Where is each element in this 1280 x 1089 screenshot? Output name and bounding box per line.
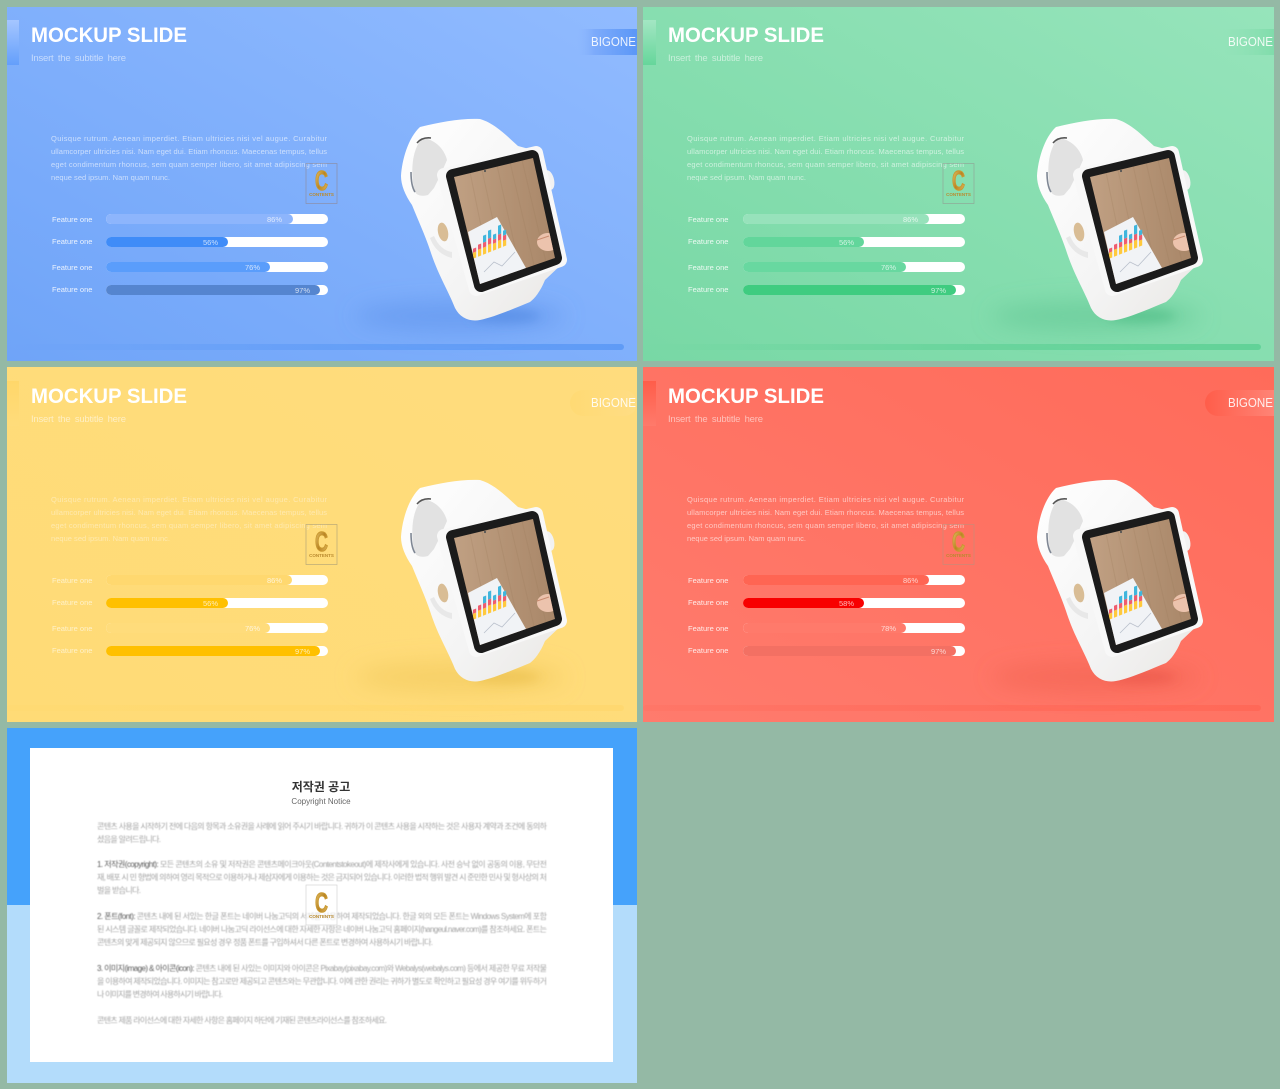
section: image and icon: 나 이미지를 변경하여 사용하시기 바랍니다. [97, 989, 223, 999]
feature bars: Feature one [688, 237, 728, 246]
body text: ullamcorper ultricies nisi. Nam eget dui. Etiam rhoncus. Maecenas tempus, tellus [51, 508, 327, 517]
section: image and icon: 을 이용하여 제작되었습니다. 이미지는 참고로만 제공되고 콘텐츠와는 무관합니다. 이에 관한 권리는 귀하가 별도로 확인하고 필요성 경우 여기를 위두하거 [97, 976, 547, 986]
watermark badge: CONTENTS [309, 914, 334, 919]
feature bars: Feature one [52, 624, 92, 633]
feature bars: 97% [931, 647, 946, 656]
feature bars: 86% [903, 576, 918, 585]
feature bars: 56% [203, 599, 218, 608]
heading: 저작권 공고 [292, 779, 350, 794]
section: copyright: 벌을 받습니다. [97, 885, 141, 895]
section: copyright: 1. 저작권(copyright): 모든 콘텐츠의 소유 및 저작권은 콘텐츠메이크아웃(Contentstokeout)에 제작사에게 있습니다. 사전 승낙 없이 공동의 이용, 무단전 [97, 859, 547, 869]
section: copyright: 재, 배포 시 민 형법에 의하여 영리 목적으로 이용하거나 제삼자에게 이용하는 것은 금지되어 있습니다. 이러한 법적 행위 발견 시 준민한 민사 및 형사상의 처 [97, 872, 547, 882]
watch shadow [991, 301, 1201, 331]
watch shadow [355, 662, 565, 692]
watermark badge: C [315, 526, 328, 557]
watermark badge: CONTENTS [946, 553, 971, 558]
feature bars: 86% [267, 215, 282, 224]
section: font: 된 시스템 글꼴로 제작되었습니다. 네이버 나눔고딕 라이선스에 대한 자세한 사항은 네이버 나눔고딕 홈페이지(hangeul.naver.com)를 참조하세요. 폰트는 [97, 924, 547, 934]
feature bars: 56% [839, 238, 854, 247]
feature bars: Feature one [52, 576, 92, 585]
subtitle: Insert the subtitle here [668, 53, 763, 64]
license note: 콘텐츠 제품 라이선스에 대한 자세한 사항은 홈페이지 하단에 기재된 콘텐츠라이선스를 참조하세요. [97, 1015, 387, 1025]
floor line [643, 705, 1261, 711]
section: image and icon [97, 963, 547, 999]
feature bars: Feature one [688, 624, 728, 633]
feature bars: 58% [839, 599, 854, 608]
body text: ullamcorper ultricies nisi. Nam eget dui. Etiam rhoncus. Maecenas tempus, tellus [687, 508, 964, 517]
floor line [7, 705, 624, 711]
feature bars: Feature one [52, 215, 92, 224]
intro paragraph [97, 821, 548, 844]
watermark badge: CONTENTS [309, 553, 334, 558]
feature bars: Feature one [52, 237, 92, 246]
watermark badge: CONTENTS [946, 192, 971, 197]
body text: Quisque rutrum. Aenean imperdiet. Etiam ultricies nisi vel augue. Curabitur [51, 134, 328, 143]
feature bars: Feature one [688, 598, 728, 607]
section: image and icon: 3. 이미지(image) & 아이콘(icon): 콘텐츠 내에 된 사있는 이미지와 아이콘은 Pixabay(pixabay.com)와 Webalys(webalys.com) 등에서 제공한 무료 저작물 [97, 963, 547, 973]
body text: neque sed ipsum. Nam quam nunc. [687, 173, 806, 182]
panel: copyright notice [7, 728, 637, 1083]
brand tag: BIGONE [1228, 35, 1273, 49]
subtitle: Insert the subtitle here [31, 414, 126, 425]
section: font: 콘텐츠의 맞게 제공되지 않으므로 필요성 경우 정품 폰트를 구입하셔서 다른 폰트로 변경하여 사용하시기 바랍니다. [97, 937, 433, 947]
left accent block [643, 381, 656, 426]
icon: smartwatch [1037, 119, 1200, 321]
brand tag: BIGONE [591, 35, 636, 49]
feature bars: 97% [931, 286, 946, 295]
floor line [7, 344, 624, 350]
title: MOCKUP SLIDE [31, 24, 187, 47]
body text: neque sed ipsum. Nam quam nunc. [687, 534, 806, 543]
feature bars: 78% [881, 624, 896, 633]
body text: eget condimentum rhoncus, sem quam semper libero, sit amet adipiscing sem [51, 521, 327, 530]
body text: ullamcorper ultricies nisi. Nam eget dui. Etiam rhoncus. Maecenas tempus, tellus [51, 147, 327, 156]
watch shadow [355, 301, 565, 331]
body text: Quisque rutrum. Aenean imperdiet. Etiam ultricies nisi vel augue. Curabitur [687, 134, 965, 143]
feature bars: Feature one [52, 646, 92, 655]
feature bars: 56% [203, 238, 218, 247]
feature bars: 86% [903, 215, 918, 224]
body text [51, 134, 328, 182]
feature bars [52, 575, 328, 656]
feature bars [688, 214, 965, 295]
watermark badge [943, 164, 974, 204]
left accent block [7, 20, 19, 65]
icon: smartwatch [401, 119, 564, 321]
section: font: 2. 폰트(font): 콘텐츠 내에 된 서있는 한글 폰트는 네이버 나눔고딕의 서체를 사용하여 제작되었습니다. 한글 외의 모든 폰트는 Windows System에 포함 [97, 911, 548, 921]
watch shadow [991, 662, 1201, 692]
body text: eget condimentum rhoncus, sem quam semper libero, sit amet adipiscing sem [687, 521, 964, 530]
body text: Quisque rutrum. Aenean imperdiet. Etiam ultricies nisi vel augue. Curabitur [687, 495, 965, 504]
feature bars: 76% [245, 263, 260, 272]
body text: Quisque rutrum. Aenean imperdiet. Etiam ultricies nisi vel augue. Curabitur [51, 495, 328, 504]
watermark badge: C [952, 526, 965, 557]
sub heading: Copyright Notice [291, 797, 351, 806]
feature bars [688, 575, 965, 656]
feature bars: Feature one [688, 576, 728, 585]
panel: yellow mockup slide [7, 367, 637, 722]
brand tag [570, 390, 637, 416]
body text: eget condimentum rhoncus, sem quam semper libero, sit amet adipiscing sem [687, 160, 964, 169]
feature bars: 86% [267, 576, 282, 585]
feature bars: 76% [881, 263, 896, 272]
brand tag: BIGONE [591, 396, 636, 410]
watermark badge [306, 524, 337, 564]
title: MOCKUP SLIDE [668, 385, 824, 408]
feature bars [52, 214, 328, 295]
feature bars: Feature one [688, 263, 728, 272]
watermark badge: CONTENTS [309, 192, 334, 197]
floor line [643, 344, 1261, 350]
body text: ullamcorper ultricies nisi. Nam eget dui. Etiam rhoncus. Maecenas tempus, tellus [687, 147, 964, 156]
subtitle: Insert the subtitle here [31, 53, 126, 64]
panel: blue mockup slide [7, 7, 637, 361]
body text [687, 134, 964, 182]
body text: neque sed ipsum. Nam quam nunc. [51, 173, 170, 182]
icon: smartwatch [1037, 480, 1200, 682]
watermark badge: C [315, 165, 328, 196]
subtitle: Insert the subtitle here [668, 414, 763, 425]
left accent block [643, 20, 656, 65]
watermark badge: C [315, 887, 328, 918]
section: font [97, 911, 548, 947]
icon: smartwatch [401, 480, 564, 682]
intro paragraph: 콘텐츠 사용을 시작하기 전에 다음의 항목과 소유권을 사례에 읽어 주시기 바랍니다. 귀하가 이 콘텐츠 사용을 시작하는 것은 사용자 계약과 조건에 동의하 [97, 821, 548, 831]
feature bars: Feature one [688, 646, 728, 655]
feature bars: 97% [295, 286, 310, 295]
brand tag [1205, 390, 1274, 416]
section: copyright [97, 859, 547, 895]
body text [687, 495, 964, 543]
body text: eget condimentum rhoncus, sem quam semper libero, sit amet adipiscing sem [51, 160, 327, 169]
feature bars: Feature one [52, 285, 92, 294]
brand tag: BIGONE [1228, 396, 1273, 410]
body text [51, 495, 328, 543]
watermark badge [306, 885, 337, 925]
feature bars: Feature one [688, 215, 728, 224]
panel: green mockup slide [643, 7, 1274, 361]
title: MOCKUP SLIDE [31, 385, 187, 408]
white notice card [30, 748, 613, 1062]
title: MOCKUP SLIDE [668, 24, 824, 47]
body text: neque sed ipsum. Nam quam nunc. [51, 534, 170, 543]
feature bars: 76% [245, 624, 260, 633]
panel: red mockup slide [643, 367, 1274, 722]
watermark badge [306, 164, 337, 204]
feature bars: Feature one [52, 263, 92, 272]
feature bars: 97% [295, 647, 310, 656]
left accent block [7, 381, 19, 426]
feature bars: Feature one [52, 598, 92, 607]
watermark badge: C [952, 165, 965, 196]
feature bars: Feature one [688, 285, 728, 294]
watermark badge [943, 524, 974, 564]
intro paragraph: 셨음을 알려드립니다. [97, 834, 161, 844]
brand tag [1212, 29, 1274, 55]
brand tag [576, 29, 637, 55]
